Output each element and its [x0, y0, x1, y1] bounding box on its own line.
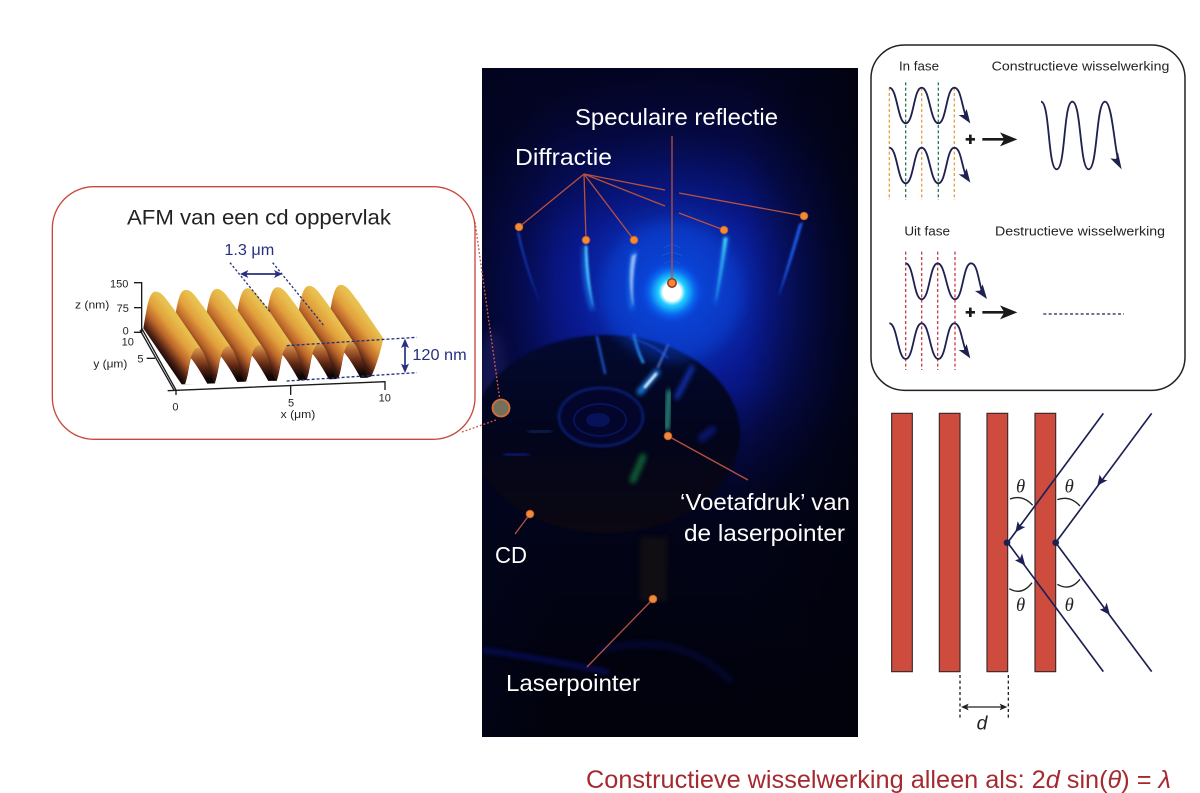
axis labels: 0	[172, 402, 178, 414]
label: Laserpointer: Laserpointer	[506, 670, 640, 696]
axis labels: x (μm)	[281, 409, 315, 421]
dotted connector: CD spot to AFM panel	[462, 222, 501, 432]
heading: AFM: AFM van een cd oppervlak	[127, 206, 391, 230]
annotation markers on photo	[515, 212, 808, 603]
axis labels: 5	[137, 354, 143, 366]
out-of-phase waves	[889, 263, 987, 359]
heading: Uit fase: Uit fase	[904, 223, 950, 238]
panel: AFM of a CD surface	[52, 187, 475, 439]
theta labels: θ	[1065, 477, 1074, 498]
theta labels: θ	[1016, 477, 1025, 498]
label: Diffractie: Diffractie	[515, 144, 612, 170]
heading: Destructieve wisselwerking: Destructieve wisselwerking	[995, 223, 1165, 238]
in-phase waves	[889, 88, 970, 183]
rings above spot	[662, 245, 682, 264]
marker: AFM spot on CD	[492, 400, 510, 416]
axis labels: y (μm)	[93, 358, 127, 370]
theta labels: θ	[1065, 595, 1074, 616]
out-of-phase guide lines	[906, 252, 955, 370]
label: Voetafdruk van de laserpointer: ‘Voetafdruk’ van	[680, 489, 850, 515]
destructive result: flat dotted line	[1043, 312, 1124, 316]
laserpointer body	[640, 537, 667, 601]
dimension: 120 nm	[287, 337, 467, 381]
axis labels: 10	[122, 337, 134, 349]
label: CD: CD	[495, 542, 527, 568]
label: Voetafdruk van de laserpointer: de laserpointer	[684, 520, 845, 546]
plus and arrow: constructive	[966, 132, 1017, 146]
label: Voetafdruk van de laserpointer	[680, 489, 850, 546]
chart axes	[134, 283, 385, 395]
axis labels: 10	[379, 393, 391, 405]
chart: 3D surface ridges	[143, 285, 383, 384]
theta labels: θ	[1016, 595, 1025, 616]
photo: laser on CD	[472, 68, 858, 737]
theta labels	[1016, 477, 1074, 616]
axis labels: 75	[117, 303, 129, 315]
spacing d	[960, 675, 1008, 734]
grating bars	[892, 413, 1056, 672]
CD disc	[472, 335, 740, 533]
axis labels: 0	[123, 325, 129, 337]
heading: Constructieve wisselwerking: Constructieve wisselwerking	[992, 58, 1169, 73]
dimension: 1.3 um: 1.3 μm	[224, 242, 274, 259]
heading: In fase: In fase	[899, 58, 939, 73]
angle arcs	[1009, 498, 1080, 591]
rays	[1004, 413, 1152, 672]
axis labels: 5	[288, 398, 294, 410]
constructive result wave	[1041, 102, 1122, 169]
axis labels: z (nm)	[75, 299, 109, 311]
panel: interference waves	[871, 45, 1185, 390]
specular spot	[602, 222, 742, 362]
diagram: grating with reflected rays	[892, 413, 1152, 734]
foreground shapes	[483, 644, 730, 680]
diffraction streaks	[517, 222, 803, 310]
spacing d: d	[977, 713, 989, 734]
annotation lines on photo	[515, 136, 804, 667]
axis labels	[75, 278, 391, 421]
in-phase guide lines	[889, 82, 954, 200]
dimension: 120 nm: 120 nm	[412, 347, 467, 364]
label: Speculaire reflectie: Speculaire reflectie	[575, 104, 778, 130]
axis labels: 150	[110, 278, 128, 290]
plus and arrow: destructive	[966, 305, 1017, 319]
dimension: 1.3 um	[224, 242, 323, 325]
